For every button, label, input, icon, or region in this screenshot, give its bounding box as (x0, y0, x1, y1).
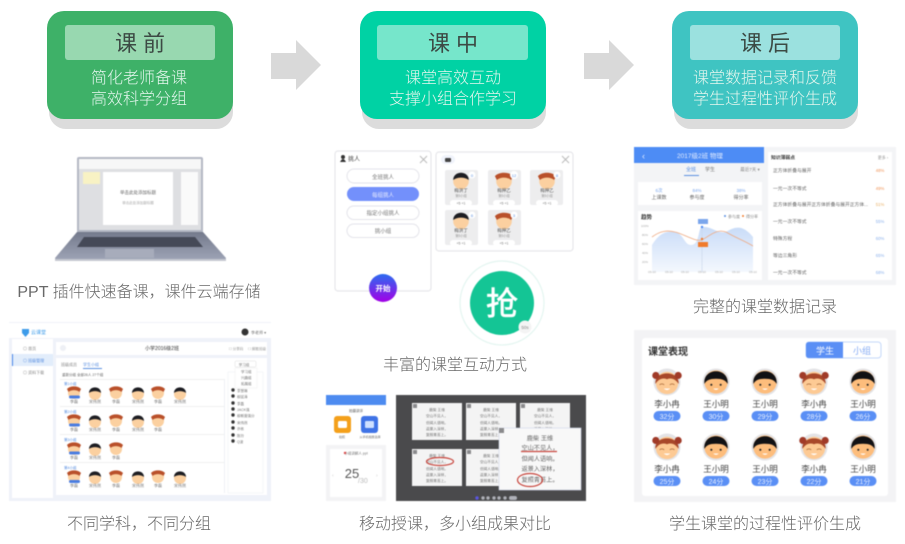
sheet text: 复照青苔上。 (426, 432, 448, 437)
popup: 挑人: 全班挑人 (372, 173, 394, 181)
caption: PPT 插件: PPT 插件快速备课，课件云端存储 (17, 283, 261, 301)
icon: logo (22, 329, 46, 337)
card: 课后 (672, 11, 858, 129)
card: 梅押乙: +5 +1 (500, 202, 509, 206)
trend chart: 60% (642, 242, 648, 246)
student: 王小明 26 (849, 368, 877, 421)
toggle: 小组 (853, 345, 871, 356)
card: 梅押乙: 3 (513, 213, 516, 218)
student: 王小明 21 (849, 433, 877, 486)
sheet text: 返景入深林， (534, 426, 556, 431)
main group list: 李磊 (70, 398, 78, 404)
knowledge points list: 65% (876, 253, 884, 258)
card: 课中: 课 中 (428, 31, 478, 56)
trend chart: 80% (642, 233, 648, 237)
main group list: 第2小组 (64, 409, 77, 414)
stats: 得分率 (733, 194, 749, 201)
right student list: 李磊 (237, 401, 244, 406)
student: 李小冉 25: 25分 (660, 477, 674, 486)
toggle (806, 342, 881, 358)
caption: 互动方式: 丰富的课堂互动方式 (383, 356, 527, 374)
sheet text: 返景入深林， (426, 472, 448, 477)
right student list (228, 361, 263, 493)
panel: 课堂表现: 课堂表现 (648, 345, 688, 358)
popup: 挑人: 指定小组挑人 (366, 209, 400, 217)
laptop illustration (55, 157, 226, 261)
icon: image (361, 416, 378, 433)
trend chart: 趋势 (641, 213, 653, 221)
right student list: 穆斯度强分 (237, 413, 255, 418)
card: 梅押乙: 梅押乙 (497, 187, 511, 194)
panel: 分组界面 (9, 322, 271, 501)
card: 梅洪丁: +5 +1 (457, 242, 466, 246)
student: 王小明 30: 30分 (709, 412, 723, 421)
main group list: 宋伟然 (89, 482, 101, 488)
caption: 课堂数据记录: 完整的课堂数据记录 (693, 298, 837, 316)
sheet text: 复照青苔上。 (534, 432, 556, 437)
knowledge points list: 正方体折叠与展开 (773, 167, 812, 174)
sheet text: 鹿柴 王维 (483, 453, 499, 458)
stats: 上课数 (651, 194, 667, 201)
main group list: 宋伟然 (89, 398, 101, 404)
caption: 不同学科: 不同学科，不同分组 (67, 515, 211, 533)
right student list: 穆延涛 (237, 394, 248, 399)
phone screens: 小组讲解人 ppt (344, 450, 368, 456)
student: 李小冉 22 (799, 433, 829, 486)
phone screens: 拍照 (339, 434, 345, 439)
enlarged sheet text: 空山不见人， (521, 444, 559, 452)
popup: 挑人 (335, 151, 431, 291)
sheet text: 鹿柴 王维 (429, 407, 445, 412)
sheet text: 返景入深林， (480, 426, 502, 431)
arrow: 课前 to 课中 (271, 40, 321, 90)
user menu (242, 328, 266, 336)
enlarged sheet text (521, 434, 559, 484)
class header (56, 342, 267, 355)
phone screens (326, 395, 386, 501)
main group list: 李磊 (70, 482, 78, 488)
student: 王小明 30 (702, 368, 730, 421)
card: 梅洪丁 (445, 210, 478, 246)
main group list: 李磊 (154, 426, 162, 432)
sheet text (426, 407, 556, 483)
right student list: 陈玲 (237, 433, 244, 438)
card: 课后: 课 后 (740, 31, 790, 56)
icon: 抢 button (460, 261, 544, 345)
sidebar: ◎ 资料下载 (23, 369, 44, 375)
stats: 6次 (655, 187, 663, 194)
knowledge points list: 一元一次不等式 (773, 218, 807, 225)
sheet text: 但闻人语响。 (480, 420, 502, 425)
knowledge points list: 更多 › (878, 154, 889, 160)
main group list: 宋伟然 (132, 398, 144, 404)
card: 课前: 课 前 (115, 31, 165, 56)
icon: logo: 云课堂 (31, 329, 46, 336)
card: 梅洪丁: 梅洪丁 (454, 187, 468, 194)
card: 课前: 高效科学分组 (91, 90, 187, 108)
card: 课后: 学生过程性评价生成 (693, 90, 837, 108)
popup: 挑人: 每组挑人 (372, 191, 394, 199)
phone screens: /30 (358, 478, 368, 485)
main group list: 李磊 (112, 398, 120, 404)
card: 梅押乙: 梅押乙 (497, 227, 511, 234)
card: 梅押乙: 8 (556, 173, 559, 178)
class header: ☐ 解散班级 (248, 346, 267, 351)
knowledge points list: 知识薄弱点 (771, 154, 795, 161)
student: 王小明 21: 21分 (856, 477, 870, 486)
main group list: 李磊 (70, 454, 78, 460)
trend chart: 参与度 (728, 213, 740, 219)
knowledge points list (768, 152, 892, 280)
main group list: 第1小组 (64, 381, 77, 386)
student: 王小明 26: 王小明 (850, 399, 876, 409)
phone screens: 拍摄讲评 (349, 408, 363, 413)
card: 课中 (360, 11, 546, 129)
student: 王小明 24: 王小明 (703, 464, 729, 474)
trend chart (638, 211, 762, 280)
panel: 课堂表现 (634, 330, 896, 502)
student: 李小冉 32: 李小冉 (654, 399, 680, 409)
sheet text: 但闻人语响。 (480, 466, 502, 471)
knowledge points list: 特殊方程 (773, 235, 792, 242)
right student list: 学习组 (241, 369, 252, 374)
enlarged sheet text: 但闻人语响。 (521, 455, 559, 463)
student: 王小明 23 (751, 433, 779, 486)
card: 梅押乙 (488, 210, 521, 246)
sheet text: 空山不见人， (534, 413, 556, 418)
trend chart: 05-10 (698, 270, 706, 274)
caption: 过程性评价: 学生课堂的过程性评价生成 (669, 515, 861, 533)
card: 梅押乙: +5 +1 (543, 202, 552, 206)
main group list: 李磊 (112, 426, 120, 432)
main group list: 李磊 (112, 482, 120, 488)
trend chart: 40% (642, 251, 648, 255)
card: 课中: 支撑小组合作学习 (389, 90, 517, 108)
trend chart: 05-10 (749, 270, 757, 274)
student: 李小冉 28: 李小冉 (801, 399, 827, 409)
arrow: 课中 to 课后 (584, 40, 634, 90)
panel: 课堂数据: 全班 (686, 166, 696, 173)
student: 王小明 29 (751, 368, 779, 421)
main group list: 李磊 (154, 482, 162, 488)
main group list: 李磊 (70, 426, 78, 432)
sheet text: 鹿柴 王维 (537, 407, 553, 412)
card: 梅押乙 (530, 170, 563, 206)
trend chart: 05-10 (715, 270, 723, 274)
student: 李小冉 22: 李小冉 (801, 464, 827, 474)
main group list: 宋伟然 (89, 426, 101, 432)
student: 李小冉 28 (799, 368, 829, 421)
right student list: 李慧琳 (237, 388, 248, 393)
card: 梅押乙: 第5小组 (498, 193, 510, 198)
card: 梅洪丁: 0 (471, 173, 474, 178)
student: 王小明 29: 29分 (758, 412, 772, 421)
main group list: 宋伟然 (132, 482, 144, 488)
card: 课前 (47, 11, 233, 129)
sidebar: ◎ 班级管理 (23, 357, 44, 363)
trend chart: 20% (642, 260, 648, 264)
knowledge points list: 49% (876, 186, 884, 191)
card: 梅洪丁 (445, 170, 478, 206)
phone screens: ‹ (332, 473, 334, 479)
sheet text: 鹿柴 王维 (483, 407, 499, 412)
main group list: 宋伟然 (174, 398, 186, 404)
laptop illustration: 单击此处添加标题 (120, 189, 156, 196)
card: 课中: 课堂高效互动 (405, 69, 501, 87)
knowledge points list: 一元一次不等式 (773, 269, 807, 276)
student: 王小明 24 (702, 433, 730, 486)
card: 梅押乙: 第5小组 (498, 233, 510, 238)
main group list: 宋伟然 (132, 426, 144, 432)
sheet text: 返景入深林， (426, 426, 448, 431)
card: 梅洪丁: 6 (471, 213, 474, 218)
card: 梅洪丁: 第5小组 (455, 233, 467, 238)
stats: 84% (692, 188, 702, 193)
panel: 课堂数据: ‹ (642, 151, 645, 161)
sheet text: 鹿柴 王维 (429, 453, 445, 458)
sheet text: 但闻人语响。 (426, 420, 448, 425)
trend chart: 100% (641, 224, 649, 228)
student: 王小明 23: 王小明 (752, 464, 778, 474)
enlarged sheet text: 返景入深林， (521, 465, 559, 473)
main group list: 班级成员 (61, 361, 77, 367)
knowledge points list: 正方体折叠与展开正方体折叠与展开正方体... (773, 201, 868, 208)
panel: 课堂数据: 2017级2班 物理 (677, 151, 723, 160)
main group list: 李磊 (154, 398, 162, 404)
right student list: 宋伟然 (237, 420, 248, 425)
student: 王小明 30: 王小明 (703, 399, 729, 409)
card: 梅押乙: 12 (512, 173, 517, 178)
trend chart: 得分率 (746, 213, 758, 219)
student: 王小明 21: 王小明 (850, 464, 876, 474)
card: 梅押乙: +5 +1 (500, 242, 509, 246)
knowledge points list: 60% (876, 236, 884, 241)
main group list: 宋伟然 (89, 454, 101, 460)
main group list: 第4小组 (64, 465, 77, 470)
sidebar: ◎ 首页 (23, 345, 36, 351)
stats: 参与度 (689, 194, 705, 201)
sheet text: 空山不见人， (426, 413, 448, 418)
trend chart: 05-10 (732, 270, 740, 274)
card: 梅押乙 (488, 170, 521, 206)
main group list: 第3小组 (64, 437, 77, 442)
sheet text: 空山不见人， (426, 459, 448, 464)
phone screens: 从手机相册选择 (359, 434, 381, 439)
stats: 38% (736, 188, 746, 193)
card: 梅洪丁: 梅洪丁 (454, 227, 468, 234)
stats (638, 182, 762, 205)
popup: 小组卡片 (436, 152, 573, 251)
student: 李小冉 28: 28分 (807, 412, 821, 421)
trend chart: 05-10 (681, 270, 689, 274)
student: 李小冉 22: 22分 (807, 477, 821, 486)
student: 李小冉 25: 李小冉 (654, 464, 680, 474)
card: 课前: 简化老师备课 (91, 69, 187, 87)
sheet text: 返景入深林， (480, 472, 502, 477)
toggle: 学生 (816, 345, 834, 356)
student: 李小冉 25 (652, 433, 682, 486)
main group list: 李磊 (112, 454, 120, 460)
icon: 抢 button: 抢 (486, 286, 518, 322)
caption: 移动授课: 移动授课，多小组成果对比 (359, 515, 551, 533)
sheet text: 但闻人语响。 (426, 466, 448, 471)
class header: ☐ 分享码 (229, 346, 244, 351)
trend chart: 05-10 (665, 270, 673, 274)
trend chart: 05-10 (648, 270, 656, 274)
panel: 课堂数据 (634, 147, 896, 285)
icon: camera (334, 416, 351, 433)
right student list: 拓展组 (241, 381, 252, 386)
knowledge points list: 48% (876, 168, 884, 173)
enlarged sheet text: 鹿柴 王维 (527, 434, 553, 442)
panel: 课堂数据: 学生 (705, 166, 715, 173)
card: 梅押乙: 第5小组 (541, 193, 553, 198)
knowledge points list: 68% (876, 270, 884, 275)
student: 李小冉 32: 32分 (660, 412, 674, 421)
sheet text: 复照青苔上。 (426, 478, 448, 483)
student: 王小明 24: 24分 (709, 477, 723, 486)
enlarged sheet text: 复照青苔上。 (521, 476, 559, 484)
right student list: 学习组 (239, 362, 250, 367)
card: 梅洪丁: +5 +1 (457, 202, 466, 206)
main group list: 宋伟然 (174, 482, 186, 488)
right student list: 许栋 (237, 426, 244, 431)
knowledge points list: 一元一次不等式 (773, 185, 807, 192)
sheet text: 复照青苔上。 (480, 432, 502, 437)
card: 梅洪丁: 第5小组 (455, 193, 467, 198)
popup: 挑人: 挑人 (348, 155, 360, 163)
main group list (56, 358, 267, 495)
button: 开始 (369, 274, 397, 302)
knowledge points list: 51% (876, 202, 884, 207)
panel: 课堂数据: 最近7天 ▾ (740, 166, 760, 173)
student: 王小明 29: 王小明 (752, 399, 778, 409)
sheet text: 但闻人语响。 (534, 420, 556, 425)
sheet text: 空山不见人， (480, 459, 502, 464)
icon: 抢 button: 50s (521, 325, 529, 330)
sidebar (12, 339, 53, 498)
sheet text: 复照青苔上。 (480, 478, 502, 483)
right student list: 兴趣组 (241, 375, 252, 380)
user menu: 李老师 ▾ (251, 329, 266, 335)
popup: 挑人: 挑小组 (375, 227, 392, 235)
main group list: 重新分组 全部26人 27个组 (62, 372, 104, 377)
class header: 小学2016级2班 (145, 345, 179, 352)
laptop illustration: 单击此处添加副标题 (122, 200, 154, 205)
student: 王小明 26: 26分 (856, 412, 870, 421)
main group list: 学生小组 (83, 361, 99, 367)
right student list: JACK强 (237, 407, 250, 412)
student: 李小冉 32 (652, 368, 682, 421)
sheet text: 空山不见人， (480, 413, 502, 418)
right student list: Q波 (237, 439, 244, 444)
card: 课后: 课堂数据记录和反馈 (693, 69, 837, 87)
card: 梅押乙: 梅押乙 (540, 187, 554, 194)
phone screens: › (376, 473, 378, 479)
phone screens: 25 (345, 466, 359, 481)
knowledge points list: 55% (876, 219, 884, 224)
button: 开始: 开始 (376, 283, 391, 293)
knowledge points list: 等边三角形 (773, 252, 797, 259)
panel: 多小组成果对比 (396, 395, 586, 501)
student: 王小明 23: 23分 (758, 477, 772, 486)
